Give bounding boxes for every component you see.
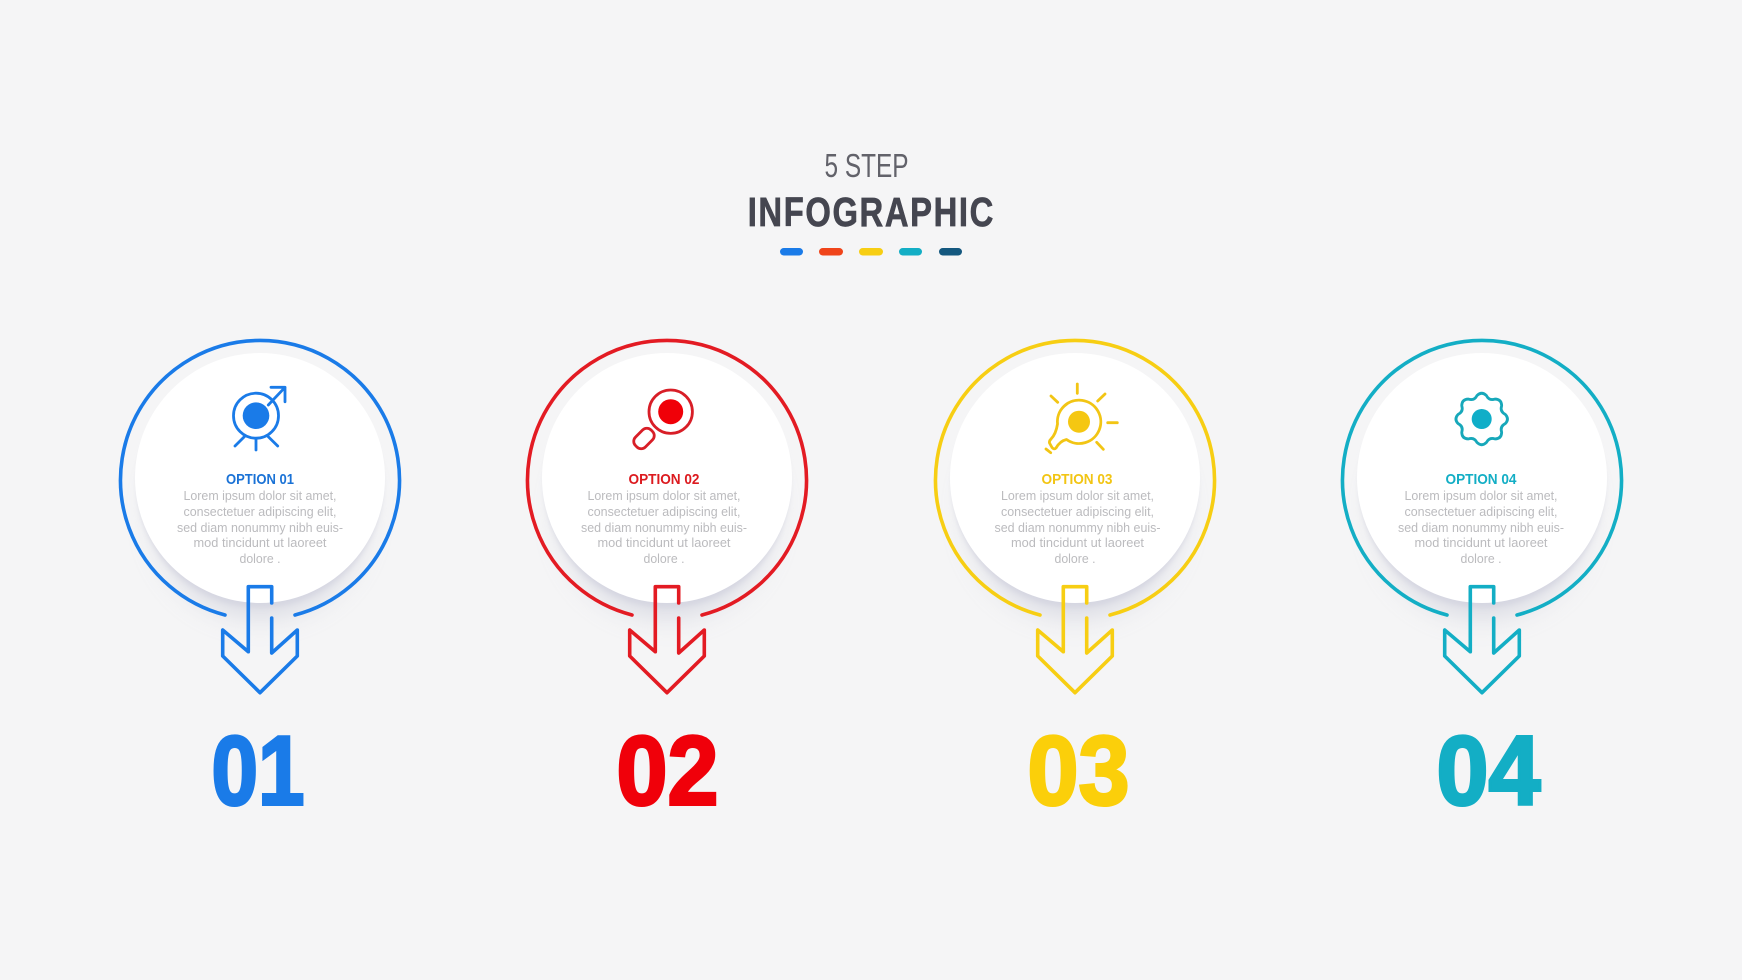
description text: sed diam nonummy nibh euis- [177, 521, 343, 535]
white disc [135, 353, 385, 603]
description text: Lorem ipsum dolor sit amet, [1001, 489, 1154, 503]
heading: INFOGRAPHIC: INFOGRAPHIC [748, 188, 993, 235]
description text [581, 489, 747, 566]
number 02: 02 [616, 716, 718, 826]
panel: option 01 [120, 340, 400, 826]
description text: consectetuer adipiscing elit, [184, 505, 336, 519]
option label: OPTION 03 [1042, 471, 1112, 488]
white disc [1357, 353, 1607, 603]
description text: Lorem ipsum dolor sit amet, [588, 489, 740, 503]
arrow [223, 587, 297, 693]
outline ring [528, 340, 807, 615]
outline ring [1342, 340, 1621, 615]
description text: mod tincidunt ut laoreet [1011, 536, 1145, 550]
option label: OPTION 02 [628, 471, 700, 488]
option label: OPTION 04 [1446, 471, 1517, 488]
arrow [1445, 587, 1519, 693]
subtitle: 5 STEP: 5 STEP [824, 147, 908, 184]
description text: mod tincidunt ut laoreet [1414, 536, 1548, 550]
disc shadow [1360, 363, 1604, 616]
description text: sed diam nonummy nibh euis- [581, 521, 747, 535]
icon: target with arrow [234, 387, 285, 450]
outline ring [936, 340, 1214, 615]
disc shadow [953, 363, 1197, 616]
icon: light bulb [1046, 384, 1117, 453]
description text: mod tincidunt ut laoreet [598, 536, 731, 550]
arrow [630, 587, 704, 693]
white disc [950, 353, 1200, 603]
number 04: 04 [1436, 716, 1540, 826]
description text [994, 489, 1160, 566]
number 01: 01 [212, 716, 304, 826]
description text: dolore . [1460, 552, 1502, 566]
description text [177, 489, 343, 566]
outline ring [120, 340, 400, 615]
panel: option 03 [936, 340, 1214, 826]
icon: gear [1456, 393, 1507, 445]
description text: consectetuer adipiscing elit, [1001, 505, 1154, 519]
description text: dolore . [1054, 552, 1096, 566]
arrow [1038, 587, 1112, 693]
icon: magnifier [631, 390, 692, 451]
colour key dashes [780, 248, 962, 256]
disc shadow [545, 363, 789, 616]
description text: sed diam nonummy nibh euis- [994, 521, 1160, 535]
panel: option 04 [1342, 340, 1621, 826]
description text: Lorem ipsum dolor sit amet, [1404, 489, 1558, 503]
description text [1398, 489, 1564, 566]
option label: OPTION 01 [226, 471, 294, 488]
panel: option 02 [528, 340, 807, 826]
number 03: 03 [1028, 716, 1130, 826]
disc shadow [138, 363, 382, 616]
description text: consectetuer adipiscing elit, [588, 505, 740, 519]
white disc [542, 353, 792, 603]
description text: dolore . [644, 552, 684, 566]
title block [748, 147, 993, 256]
description text: mod tincidunt ut laoreet [194, 536, 327, 550]
description text: consectetuer adipiscing elit, [1404, 505, 1558, 519]
description text: sed diam nonummy nibh euis- [1398, 521, 1564, 535]
description text: dolore . [240, 552, 280, 566]
description text: Lorem ipsum dolor sit amet, [184, 489, 336, 503]
